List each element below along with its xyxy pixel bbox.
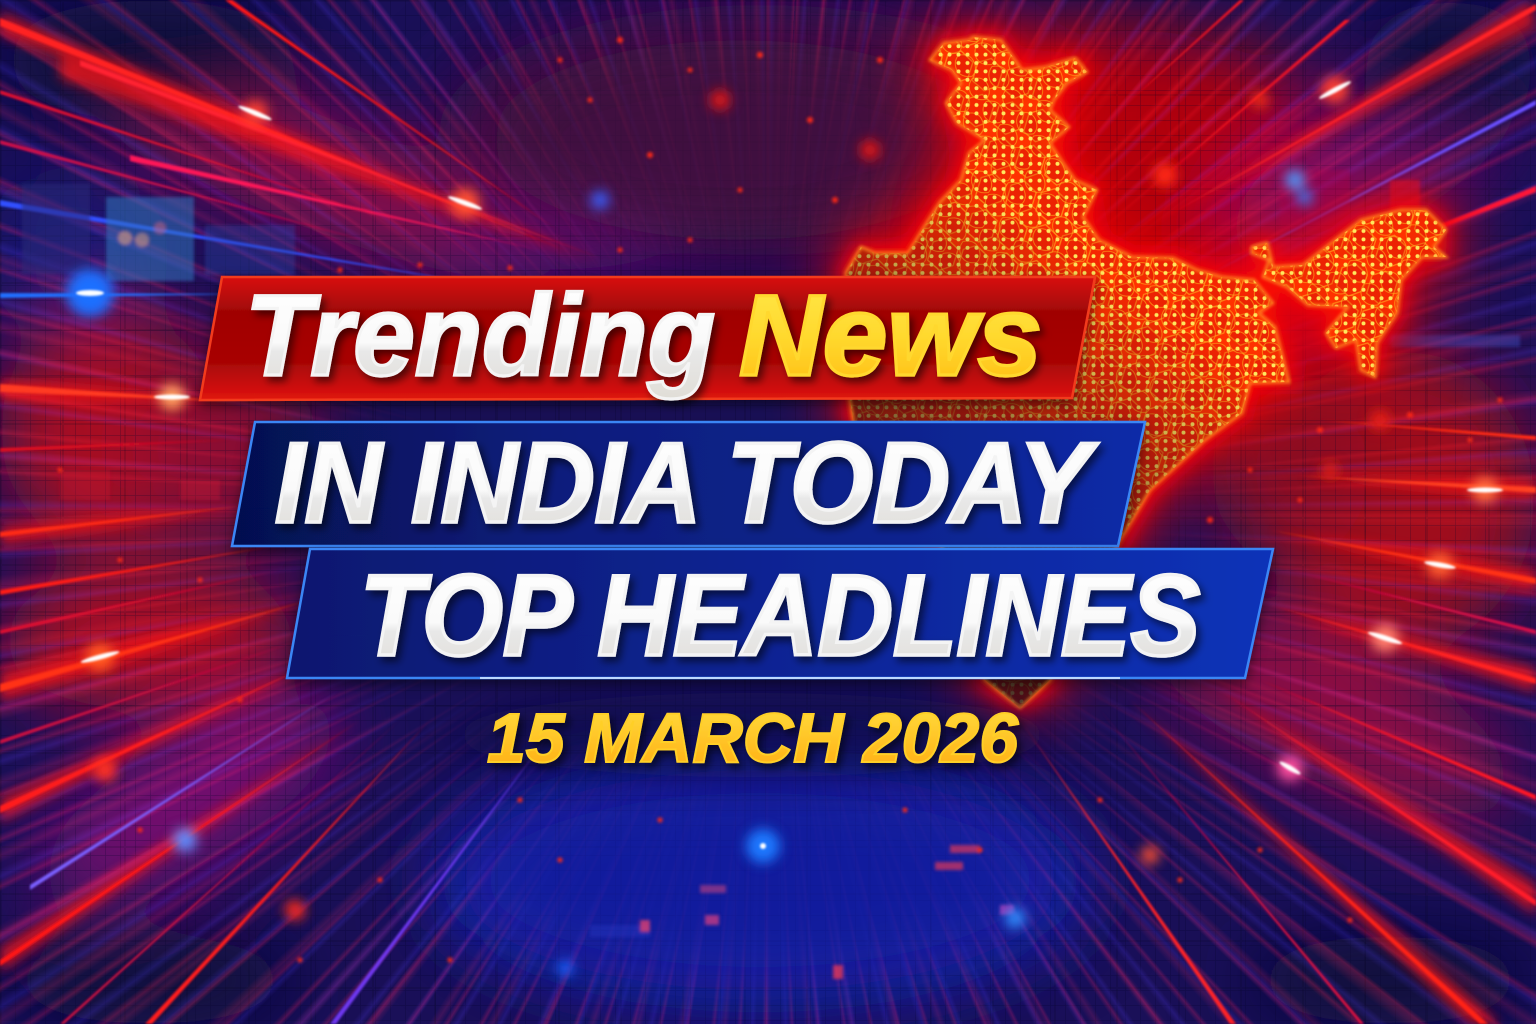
heading: News: News (739, 272, 1042, 400)
date band shade (452, 693, 1052, 777)
shaded quiet zones above and below the banners (460, 40, 1060, 990)
panel: In India Today banner (232, 420, 1145, 547)
heading: TOP HEADLINES: TOP HEADLINES (360, 552, 1200, 680)
heading: IN INDIA TODAY: IN INDIA TODAY (275, 420, 1098, 547)
screens and data blocks (22, 170, 1520, 979)
panel: Top Headlines banner (287, 549, 1273, 680)
heading: Trending: Trending (245, 272, 715, 400)
panel: Trending News banner (200, 272, 1095, 400)
date: 15 MARCH 2026 (487, 699, 1019, 777)
map outer glow (846, 37, 1446, 708)
